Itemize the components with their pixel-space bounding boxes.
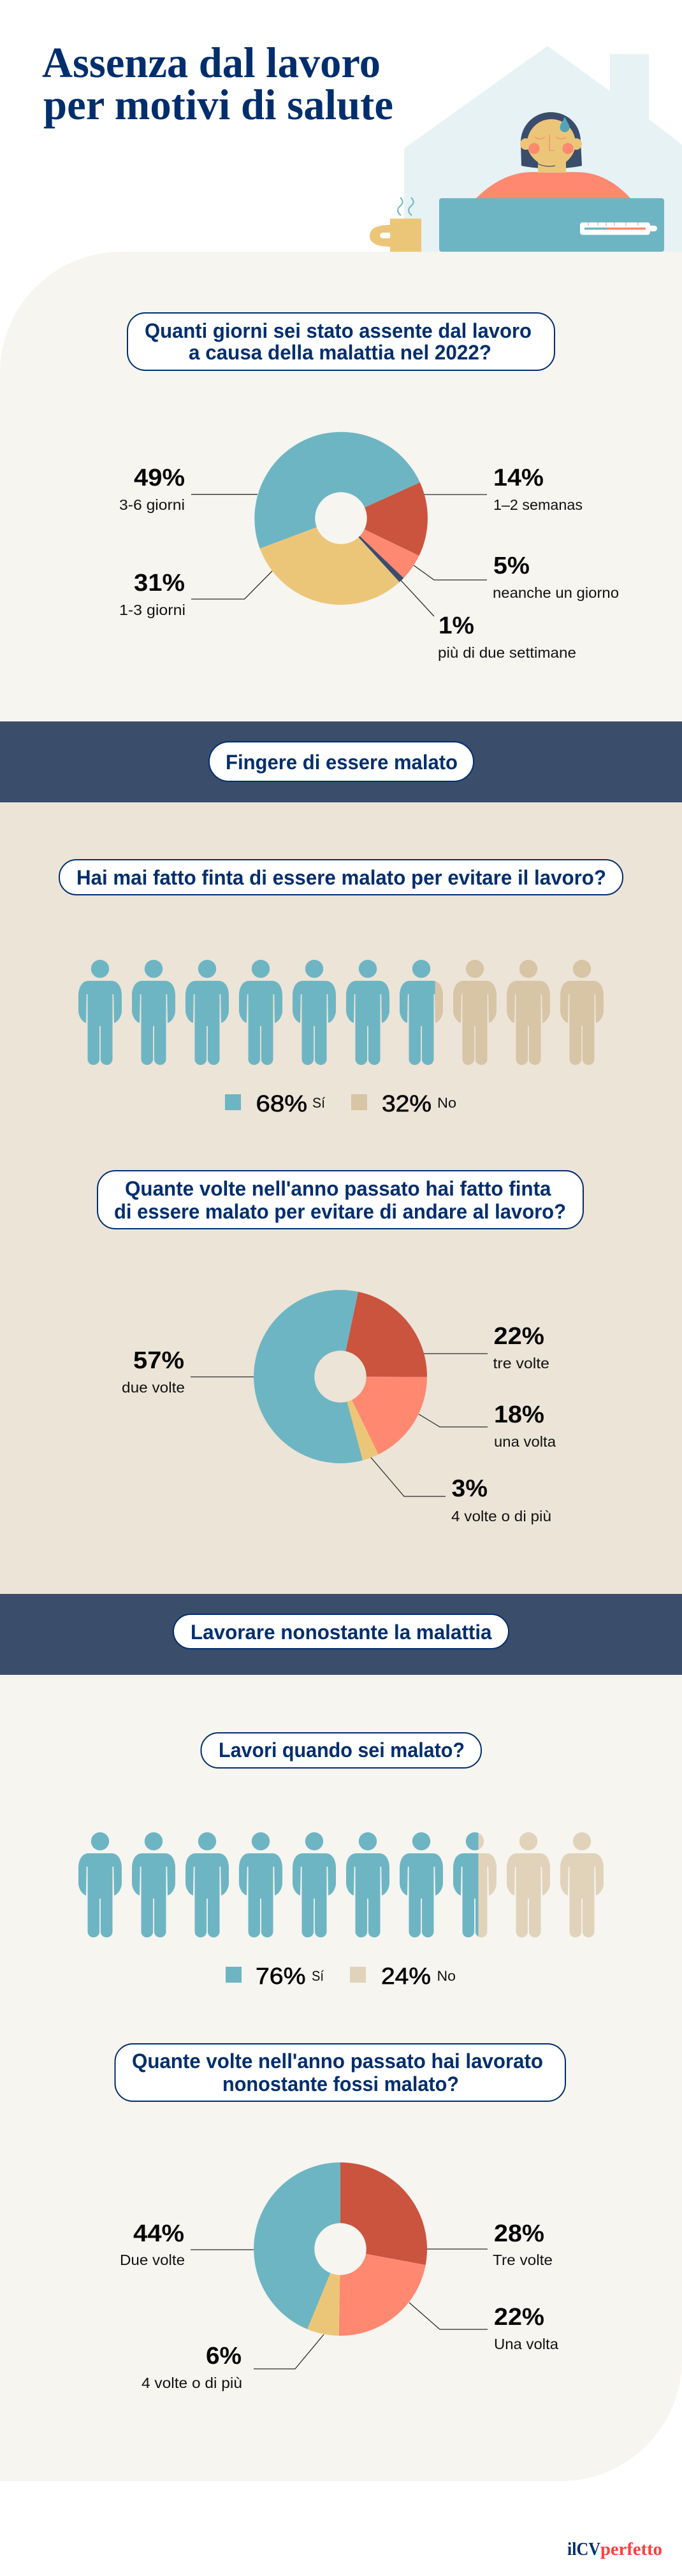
- icon: house: [404, 46, 682, 255]
- callout: 49%: 3-6 giorni: [119, 496, 185, 513]
- callout: 18%: una volta: [494, 1433, 556, 1450]
- panel: pretending section: [0, 802, 682, 1594]
- question pill: how many times pretended: [98, 1171, 583, 1229]
- band: working despite illness: [0, 1594, 682, 1675]
- logo: ilCVperfetto: ilCV: [567, 2539, 600, 2559]
- question pill: do you work sick: [201, 1733, 481, 1768]
- legend: 68% / 32%: 68%: [256, 1090, 307, 1117]
- legend: 76% / 24%: No: [437, 1968, 456, 1984]
- callout: 31%: 1-3 giorni: [119, 602, 185, 618]
- question pill: how many times worked sick: Quante volte nell'anno passato hai lavorato: [132, 2050, 543, 2073]
- legend: 76% / 24%: [226, 1963, 456, 1989]
- panel: absence days: [0, 252, 682, 721]
- callout: 6%: [141, 2334, 324, 2391]
- callout: 28%: Tre volte: [493, 2252, 553, 2268]
- callout: 22%: Una volta: [494, 2336, 558, 2352]
- logo: ilCVperfetto: [567, 2539, 662, 2559]
- callout: 22%: [409, 2303, 558, 2352]
- question pill: do you work sick: Lavori quando sei malato?: [219, 1739, 465, 1762]
- legend: 76% / 24%: 76%: [256, 1963, 306, 1989]
- callout: 14%: [424, 465, 583, 513]
- question pill: how many times worked sick: [115, 2044, 565, 2101]
- callout: 14%: 14%: [493, 465, 544, 491]
- callout: 31%: [119, 570, 272, 618]
- heading pill: Fingere di essere malato: [209, 742, 474, 781]
- callout: 1%: 1%: [439, 612, 474, 639]
- legend: 76% / 24%: 24%: [381, 1963, 431, 1989]
- legend: 76% / 24%: Sí: [312, 1968, 324, 1984]
- callout: 49%: [119, 465, 258, 513]
- callout: 31%: 31%: [134, 570, 185, 597]
- question pill: ever pretended: Hai mai fatto finta di essere malato per evitare il lavoro?: [76, 866, 606, 889]
- callout: 22%: 22%: [494, 2304, 544, 2331]
- legend: 68% / 32%: No: [437, 1095, 456, 1111]
- callout: 22%: 22%: [493, 1323, 544, 1350]
- callout: 28%: 28%: [494, 2220, 544, 2247]
- callout: 57%: due volte: [122, 1379, 185, 1396]
- band: pretending to be sick: [0, 721, 682, 802]
- pictogram: 68% yes, 32% no: [78, 960, 604, 1065]
- callout: 22%: [424, 1323, 549, 1371]
- legend: 68% / 32%: 32%: [382, 1090, 432, 1117]
- callout: 3%: 3%: [451, 1475, 488, 1502]
- title: [42, 38, 393, 129]
- legend: 68% / 32%: Sí: [312, 1095, 325, 1111]
- callout: 5%: 5%: [493, 553, 530, 579]
- callout: 44%: Due volte: [120, 2252, 185, 2268]
- callout: 22%: tre volte: [493, 1355, 549, 1371]
- callout: 18%: 18%: [494, 1401, 544, 1428]
- heading pill: Fingere di essere malato: Fingere di essere malato: [226, 751, 458, 774]
- question pill: days absent: Quanti giorni sei stato assente dal lavoro: [145, 319, 532, 342]
- question pill: how many times pretended: di essere malato per evitare di andare al lavoro?: [114, 1200, 566, 1223]
- callout: 18%: [419, 1401, 556, 1450]
- callout: 44%: 44%: [133, 2220, 184, 2247]
- callout: 44%: [120, 2220, 254, 2268]
- callout: 57%: [122, 1347, 254, 1396]
- callout: 6%: 6%: [206, 2343, 242, 2370]
- callout: 5%: [414, 553, 619, 601]
- icon: laptop with thermometer: [439, 198, 664, 252]
- callout: 3%: 4 volte o di più: [451, 1508, 551, 1524]
- question pill: days absent: a causa della malattia nel 2022?: [189, 341, 491, 364]
- callout: 3%: [371, 1458, 551, 1524]
- heading pill: Lavorare nonostante la malattia: Lavorare nonostante la malattia: [191, 1621, 492, 1644]
- logo: ilCVperfetto: perfetto: [600, 2539, 662, 2559]
- title: per motivi di salute: [43, 80, 393, 129]
- legend: 68% / 32%: [225, 1090, 456, 1117]
- icon: steaming mug: [370, 198, 421, 252]
- question pill: how many times pretended: Quante volte nell'anno passato hai fatto finta: [125, 1177, 551, 1200]
- callout: 1%: più di due settimane: [438, 644, 576, 661]
- donut chart: times pretended: [254, 1290, 427, 1463]
- callout: 5%: neanche un giorno: [493, 584, 619, 601]
- question pill: how many times worked sick: nonostante fossi malato?: [222, 2073, 459, 2095]
- title: Assenza dal lavoro: [42, 38, 381, 87]
- donut chart: days absent: [254, 432, 428, 605]
- icon: person with fever: [476, 112, 630, 198]
- callout: 14%: 1–2 semanas: [493, 496, 583, 513]
- panel: working while sick: [0, 1675, 682, 2481]
- callout: 49%: 49%: [134, 465, 185, 491]
- pictogram: 76% yes, 24% no: [78, 1832, 604, 1937]
- callout: 6%: 4 volte o di più: [141, 2375, 242, 2391]
- illustration: sick person at home: [370, 46, 682, 255]
- heading pill: Lavorare nonostante la malattia: [173, 1614, 509, 1649]
- callout: 28%: [427, 2220, 553, 2268]
- donut chart: times worked sick: [254, 2162, 427, 2336]
- callout: 1%: [401, 581, 576, 661]
- question pill: days absent: [127, 313, 555, 370]
- callout: 57%: 57%: [133, 1347, 184, 1374]
- question pill: ever pretended: [59, 860, 623, 895]
